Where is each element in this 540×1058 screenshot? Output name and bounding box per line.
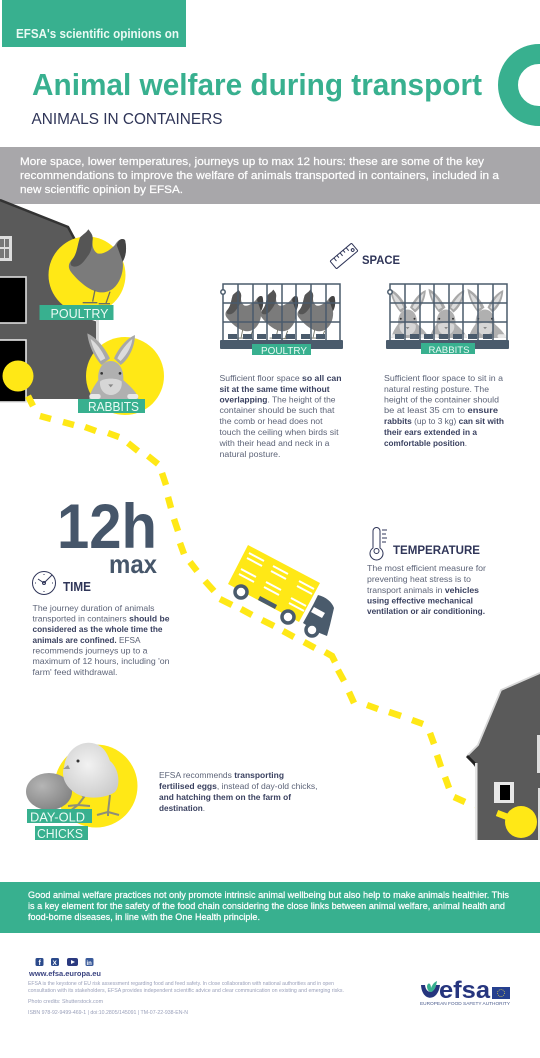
text: day-old chicks: EFSA recommends transporting	[159, 770, 284, 780]
text: day-old chicks: and hatching them on the farm of	[159, 792, 291, 802]
text: time: The journey duration of animals	[32, 603, 155, 613]
text: temperature: using effective mechanical	[367, 596, 473, 606]
social icons: in	[86, 961, 92, 967]
title: Animal welfare during transport	[32, 67, 482, 102]
section heading: time	[32, 572, 91, 594]
text: rabbit space	[384, 373, 504, 448]
text: poultry space: touch the ceiling when birds sit	[220, 427, 339, 437]
text: rabbit space: rabbits (up to 3 kg) can sit with	[384, 416, 504, 426]
text: rabbit space: be at least 35 cm to ensure	[384, 405, 498, 415]
intro band: More space, lower temperatures, journeys up to max 12 hours: these are some of the key	[20, 156, 485, 168]
icon: thermometer	[370, 528, 387, 560]
section heading: temperature: TEMPERATURE	[393, 543, 480, 557]
header tab	[2, 0, 186, 47]
conclusion band: Good animal welfare practices not only promote intrinsic animal wellbeing but also help to make animals healthier. This	[28, 890, 509, 901]
text: rabbit space: height of the container should	[384, 394, 499, 404]
text: temperature: transport animals in vehicles	[367, 585, 479, 595]
social icons: f	[38, 960, 42, 967]
intro band: recommendations to improve the welfare of animals transported in containers, included in a	[20, 170, 500, 182]
text: day-old chicks: destination.	[159, 803, 205, 813]
section heading: space	[330, 243, 400, 269]
container: poultry	[220, 284, 343, 357]
poultry illustration: POULTRY	[50, 306, 109, 321]
text: time	[32, 603, 170, 677]
barn: destination farm	[467, 673, 540, 840]
rabbit illustration	[78, 333, 164, 415]
text: poultry space	[219, 373, 342, 459]
footer credits	[28, 981, 344, 1016]
journey start marker	[2, 360, 34, 392]
text: poultry space: overlapping. The height of the	[220, 394, 336, 404]
text: temperature: The most efficient measure for	[367, 563, 486, 573]
rabbit illustration: RABBITS	[88, 400, 139, 414]
chick illustration	[26, 743, 138, 841]
text: time: recommends journeys up to a	[32, 646, 148, 656]
text: poultry space: sit at the same time without	[220, 384, 330, 394]
decorative green ring	[508, 54, 540, 116]
text: temperature: ventilation or air conditioning.	[367, 606, 485, 616]
big number: 12h: 12h	[57, 492, 157, 562]
poultry illustration	[40, 229, 126, 321]
container: rabbits	[386, 284, 509, 356]
conclusion band	[0, 882, 540, 933]
EFSA logo	[420, 977, 511, 1007]
text: poultry space: with their head and neck in a	[219, 438, 330, 448]
EFSA logo: efsa	[439, 977, 491, 1004]
footer credits: Photo credits: Shutterstock.com	[28, 999, 103, 1005]
yellow dashed journey route	[28, 396, 508, 818]
footer credits: ISBN 978-92-9499-469-1 | doi:10.2805/145091 | TM-07-22-938-EN-N	[28, 1010, 188, 1016]
social icons: X	[52, 960, 58, 967]
text: time: animals are confined. EFSA	[32, 635, 141, 645]
text: time: considered as the whole time the	[32, 624, 163, 634]
journey end marker	[497, 806, 537, 838]
intro band: new scientific opinion by EFSA.	[20, 184, 183, 196]
icon: clock	[32, 572, 56, 594]
chick illustration: DAY-OLD	[30, 810, 85, 825]
container: poultry: POULTRY	[261, 345, 307, 357]
social icons	[36, 958, 94, 967]
conclusion band: is a key element for the safety of the food chain considering the close links between animal welfare, animal health and	[28, 901, 505, 912]
text: rabbit space: natural resting posture. The	[384, 384, 489, 394]
footer credits: EFSA is the keystone of EU risk assessment regarding food and feed safety. In close collaboration with national authorities and in open	[28, 981, 334, 987]
header tab: EFSA's scientific opinions on	[16, 27, 179, 41]
text: rabbit space: their ears extended in a	[384, 427, 477, 437]
text: day-old chicks	[159, 770, 318, 813]
subtitle: ANIMALS IN CONTAINERS	[32, 111, 222, 128]
icon: ruler	[330, 243, 358, 269]
website: www.efsa.europa.eu	[28, 969, 101, 978]
text: time: maximum of 12 hours, including 'on	[32, 656, 170, 666]
section heading: temperature	[370, 528, 480, 560]
chick illustration: CHICKS	[37, 826, 83, 841]
text: poultry space: container should be such that	[220, 405, 335, 415]
text: poultry space: natural posture.	[220, 449, 280, 459]
text: temperature	[367, 563, 486, 616]
barn: departure farm	[0, 199, 99, 402]
icon: truck	[228, 545, 334, 636]
text: time: transported in containers should be	[32, 614, 170, 624]
text: temperature: preventing heat stress is to	[367, 574, 471, 584]
conclusion band: food-borne diseases, in line with the One Health principle.	[28, 912, 260, 923]
EFSA logo: EUROPEAN FOOD SAFETY AUTHORITY	[420, 1001, 511, 1007]
text: rabbit space: Sufficient floor space to sit in a	[384, 373, 503, 383]
text: time: farm' feed withdrawal.	[32, 667, 118, 677]
footer credits: consultation with its stakeholders, EFSA provides independent scientific advice and clear communication on existing and emerging risks.	[28, 988, 344, 994]
text: poultry space: Sufficient floor space so all can	[220, 373, 342, 383]
section heading: time: TIME	[63, 580, 91, 594]
text: poultry space: the comb or head does not	[220, 416, 323, 426]
container: rabbits: RABBITS	[428, 345, 470, 356]
text: rabbit space: comfortable position.	[384, 438, 467, 448]
intro band	[0, 147, 540, 204]
section heading: space: SPACE	[362, 253, 400, 267]
text: day-old chicks: fertilised eggs, instead of day-old chicks,	[159, 781, 318, 791]
big number: max: max	[109, 549, 157, 579]
